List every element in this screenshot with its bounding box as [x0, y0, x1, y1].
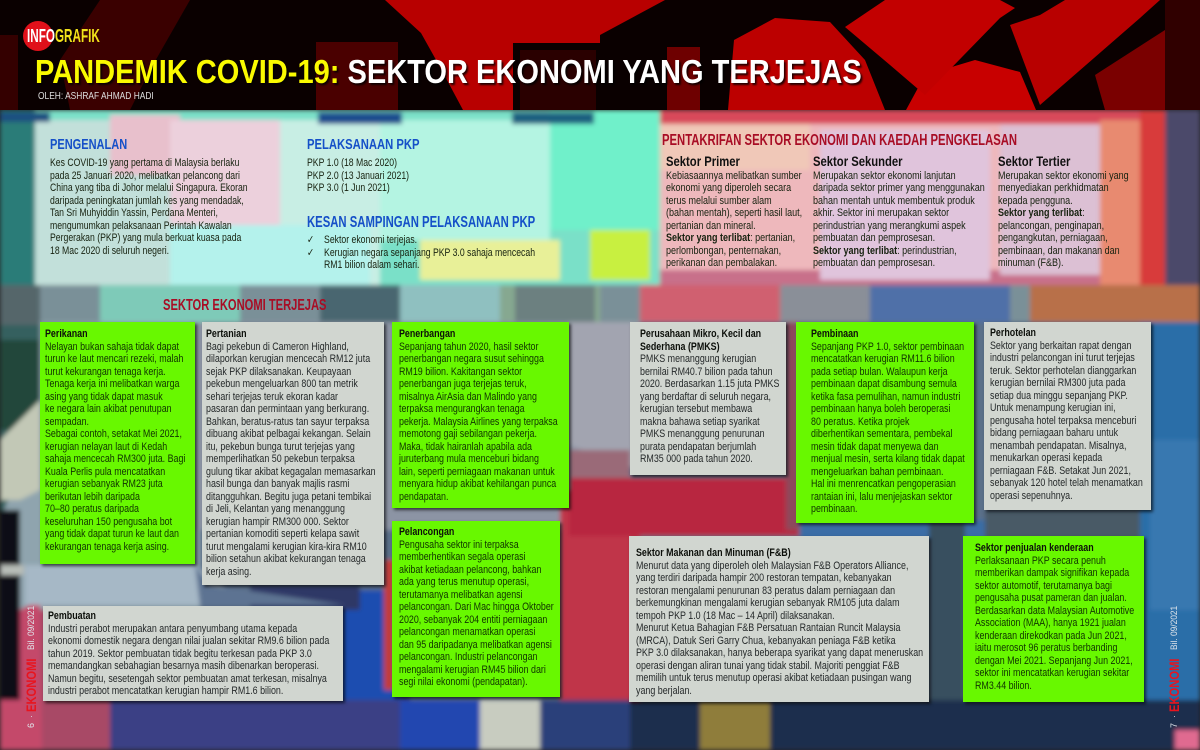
card: penerbangan: misalnya AirAsia dan Malindo yang: [399, 390, 537, 402]
column: sektor primer: Sektor yang terlibat: pertanian,: [666, 232, 795, 244]
card: makanan dan minuman: (MRCA), Datuk Seri Garry Chua, kebanyakan peniaga F&B ketika: [636, 634, 896, 646]
card: pelancongan: pelancongan. Industri pelancongan: [399, 651, 537, 663]
card: pelancongan: mengalami kerugian RM45 bilion dari: [399, 664, 546, 676]
checklist: kesan: ✓: [307, 246, 314, 258]
checklist: kesan: [307, 234, 535, 271]
text: pengenalan: Pergerakan (PKP) yang mula berkuat kuasa pada: [50, 232, 241, 244]
card: perikanan: keseluruhan 150 pengusaha bot: [45, 516, 172, 528]
panel: pengenalan: [50, 136, 248, 256]
card: perikanan: Nelayan bukan sahaja tidak dapat: [45, 340, 179, 352]
column: sektor tertier: pengangkutan, perniagaan,: [998, 232, 1108, 244]
folio: right page: Bil. 09/2021: [1169, 606, 1179, 650]
column: sektor sekunder: bahan mentah untuk membentuk produk: [813, 194, 975, 206]
card: penerbangan: Penerbangan: [399, 328, 455, 340]
main title: PANDEMIK COVID-19: SEKTOR EKONOMI YANG TERJEJAS: [35, 53, 862, 90]
column: sektor tertier: pelancongan, penginapan,: [998, 220, 1104, 232]
card: pembinaan: pada setiap bulan. Walaupun kerja: [811, 366, 948, 378]
card: pembinaan: [796, 322, 974, 523]
card: pertanian: memperlihatkan 50 pekebun terpaksa: [206, 453, 355, 465]
card: perhotelan: Perhotelan: [990, 327, 1036, 339]
text: pengenalan: [50, 157, 248, 256]
card: pembinaan: pembinaan hanya boleh beroperasi: [811, 403, 950, 415]
heading: sektor ekonomi terjejas: SEKTOR EKONOMI TERJEJAS: [163, 297, 327, 314]
heading: pentakrifan: PENTAKRIFAN SEKTOR EKONOMI DAN KAEDAH PENGKELASAN: [662, 132, 1017, 149]
card: pembinaan: mesin tidak dapat menyewa dan: [811, 440, 939, 452]
card: penjualan kenderaan: RM3.44 bilion.: [975, 680, 1032, 692]
column: sektor primer: Sektor Primer: [666, 153, 740, 169]
card: penerbangan: [392, 322, 569, 508]
byline: OLEH: ASHRAF AHMAD HADI: [38, 90, 154, 102]
column: sektor tertier: menyediakan perkhidmatan: [998, 182, 1109, 194]
card: makanan dan minuman: yang berjalan.: [636, 684, 692, 696]
card: makanan dan minuman: tempoh PKP 1.0 (18 Mac – 14 April) dilaksanakan.: [636, 610, 835, 622]
card: perikanan: Perikanan: [45, 328, 88, 340]
card: pelancongan: Pelancongan: [399, 526, 454, 538]
column: sektor sekunder: daripada sektor primer yang menggunakan: [813, 182, 985, 194]
card: makanan dan minuman: [629, 536, 929, 702]
card: pertanian: Bagi pekebun di Cameron Highland,: [206, 340, 349, 352]
heading: pelaksanaan PKP: PELAKSANAAN PKP: [307, 136, 420, 153]
card: pertanian: sehari terjejas teruk ekoran kadar: [206, 390, 338, 402]
card: pertanian: di Jeli, Kelantan yang menanggung: [206, 503, 345, 515]
card: PMKS: Sederhana (PMKS): [640, 340, 720, 352]
card: pertanian: gulung tikar akibat kegagalan memasarkan: [206, 466, 376, 478]
card: makanan dan minuman: operasi dengan aliran tunai yang tidak stabil. Majoriti penggiat F&B: [636, 660, 900, 672]
text: PKP dates: PKP 2.0 (13 Januari 2021): [307, 170, 409, 182]
card: pertanian: pekebun mengeluarkan 800 tan metrik: [206, 378, 358, 390]
column: sektor primer: (bahan mentah), seperti hasil laut,: [666, 207, 802, 219]
card: perikanan: kekurangan tenaga kerja asing.: [45, 540, 169, 552]
card: pembinaan: Hal ini menrencatkan pengoperasian: [811, 478, 956, 490]
column: sektor primer: perlombongan, penternakan,: [666, 244, 781, 256]
card: makanan dan minuman: yang terdiri daripada hampir 200 restoran tempatan, kebanyakan: [636, 572, 892, 584]
card: perikanan: asing yang tidak dapat masuk: [45, 390, 163, 402]
card: pembinaan: ketika fasa pemulihan, namun industri: [811, 390, 960, 402]
card: PMKS: PMKS menanggung kerugian: [640, 353, 756, 365]
text: pengenalan: 18 Mac 2020 di seluruh negeri.: [50, 244, 169, 256]
card: makanan dan minuman: Menurut data yang diperoleh oleh Malaysian F&B Operators Alliance,: [636, 560, 908, 572]
card: perikanan: kerugian sebanyak RM23 juta: [45, 478, 163, 490]
card: perikanan: turut kekurangan tenaga kerja.: [45, 366, 166, 378]
card: penerbangan: pendapatan.: [399, 490, 448, 502]
card: pembinaan: rantaian ini, lalu menjejaskan sektor: [811, 490, 952, 502]
folio: left page: Bil. 09/2021: [26, 606, 36, 650]
card: pertanian: kerja asing.: [206, 566, 251, 578]
card: pelancongan: pelancongan menamatkan operasi: [399, 626, 535, 638]
card: perikanan: Kuala Perlis pula mencatatkan: [45, 466, 165, 478]
text: pengenalan: pada 25 Januari 2020, melibatkan pelancong dari: [50, 170, 240, 182]
card: penjualan kenderaan: iaitu merosot 96 peratus berbanding: [975, 642, 1117, 654]
text: PKP dates: PKP 3.0 (1 Jun 2021): [307, 182, 390, 194]
card: pembuatan: tahun 2019. Sektor pembuatan tidak begitu terkesan pada PKP 3.0: [48, 648, 312, 660]
panel: pentakrifan sektor: [662, 132, 1129, 269]
card: pembuatan: Industri perabot merupakan antara penyumbang utama kepada: [48, 622, 297, 634]
card: perhotelan: teruk. Sektor perhotelan dianggarkan: [990, 364, 1136, 376]
card: pelancongan: pelancongan. Dari Mac hingga Oktober: [399, 601, 554, 613]
card: perikanan: berikutan lebih daripada: [45, 490, 140, 502]
badge: infografik: [23, 21, 100, 51]
card: pertanian: sejak PKP dilaksanakan. Keupayaan: [206, 366, 351, 378]
card: pembuatan: memandangkan sebahagian besarnya masih dibenarkan beroperasi.: [48, 660, 319, 672]
card: PMKS: kerugian tersebut membawa: [640, 403, 752, 415]
card: pertanian: bilion setahun akibat kekurangan tenaga: [206, 553, 366, 565]
card: penerbangan: pekerja. Malaysia Airlines yang terpaksa: [399, 416, 558, 428]
card: pertanian: Pertanian: [206, 328, 247, 340]
card: PMKS: [630, 322, 786, 475]
column: sektor tertier: [998, 153, 1129, 269]
checklist: kesan: Sektor ekonomi terjejas.: [324, 234, 417, 246]
card: penerbangan: Sepanjang tahun 2020, hasil sektor: [399, 340, 538, 352]
card: pelancongan: dan 95 daripadanya melibatkan agensi: [399, 638, 552, 650]
text: pengenalan: mengumumkan pelaksanaan Perintah Kawalan: [50, 220, 232, 232]
card: PMKS: purata pendapatan berjumlah: [640, 440, 756, 452]
card: perhotelan: Untuk menampung kerugian ini,: [990, 402, 1116, 414]
card: PMKS: Perusahaan Mikro, Kecil dan: [640, 328, 761, 340]
column: sektor primer: ekonomi yang diperoleh secara: [666, 182, 791, 194]
card: pelancongan: ada yang terus menutup operasi,: [399, 576, 529, 588]
card: perikanan: Sebagai contoh, setakat Mei 2021,: [45, 428, 182, 440]
card: pembuatan: Pembuatan: [48, 610, 96, 622]
windows: [0, 112, 50, 122]
card: penjualan kenderaan: sektor ini mencatatkan kerugian sekitar: [975, 667, 1129, 679]
card: pelancongan: 2020, sebanyak 204 entiti perniagaan: [399, 614, 547, 626]
card: makanan dan minuman: Sektor Makanan dan Minuman (F&B): [636, 547, 791, 559]
card: perikanan: [40, 322, 195, 564]
card: PMKS: PMKS menanggung penurunan: [640, 428, 765, 440]
top band: [0, 0, 1200, 110]
card: PMKS: yang berdaftar di seluruh negara,: [640, 390, 771, 402]
card: perikanan: yang tidak dapat turun ke laut dan: [45, 528, 179, 540]
card: perhotelan: operasi sepenuhnya.: [990, 490, 1073, 502]
text: pengenalan: Tan Sri Muhyiddin Yassin, Perdana Menteri,: [50, 207, 218, 219]
card: pembinaan: mengeluarkan bahan pembinaan.: [811, 466, 944, 478]
card: PMKS: 2020. Berdasarkan 1.15 juta PMKS: [640, 378, 779, 390]
card: penjualan kenderaan: pengusaha pusat pameran dan jualan.: [975, 592, 1127, 604]
column: sektor sekunder: pembuatan dan pemprosesan.: [813, 232, 935, 244]
mid band: [0, 110, 1200, 285]
card: pelancongan: segi nilai ekonomi (pendapatan).: [399, 676, 528, 688]
card: perikanan: sempadan.: [45, 416, 89, 428]
text: pengenalan: Kes COVID-19 yang pertama di Malaysia berlaku: [50, 157, 239, 169]
badge: infografik: INFOGRAFIK: [27, 26, 100, 46]
card: PMKS: bernilai RM40.7 bilion pada tahun: [640, 366, 773, 378]
card: pertanian: ditangguhkan. Begitu juga petani tembikai: [206, 490, 371, 502]
card: penjualan kenderaan: sektor automotif, terutamanya bagi: [975, 580, 1112, 592]
card: pertanian: [202, 322, 384, 585]
column: sektor sekunder: Sektor yang terlibat: perindustrian,: [813, 244, 957, 256]
column: sektor sekunder: Merupakan sektor ekonomi lanjutan: [813, 170, 956, 182]
lower mural: [0, 280, 1200, 750]
text: PKP dates: PKP 1.0 (18 Mac 2020): [307, 157, 397, 169]
card: pelancongan: memberhentikan segala operasi: [399, 551, 526, 563]
card: pertanian: pasaran dan permintaan yang berkurang.: [206, 403, 369, 415]
card: penerbangan: terpaksa mengurangkan tenaga: [399, 403, 525, 415]
checklist: kesan: RM1 bilion dalam sehari.: [324, 259, 419, 271]
panel: pelaksanaan PKP: [307, 136, 535, 271]
column: sektor primer: perikanan dan pembalakan.: [666, 257, 777, 269]
card: pertanian: turut mengalami kerugian kira-kira RM10: [206, 540, 367, 552]
card: penjualan kenderaan: dengan Mei 2021. Sepanjang Jun 2021,: [975, 654, 1133, 666]
card: pembinaan: pembinaan dapat disambung semula: [811, 378, 957, 390]
card: pembinaan: menjual mesin, serta kilang tidak dapat: [811, 453, 965, 465]
card: penerbangan: lain, seperti perniagaan makanan untuk: [399, 466, 555, 478]
card: perhotelan: pengusaha hotel terpaksa menceburi: [990, 414, 1136, 426]
column: sektor tertier: Merupakan sektor ekonomi yang: [998, 170, 1129, 182]
folio: right page: EKONOMI: [1166, 658, 1182, 712]
card: penerbangan: penerbangan negara susut sehingga: [399, 353, 544, 365]
card: penjualan kenderaan: Sektor penjualan kenderaan: [975, 542, 1094, 554]
title block: [23, 21, 864, 102]
folio: right page: [1166, 606, 1182, 728]
card: pelancongan: akibat ketiadaan pelancong, bahkan: [399, 564, 541, 576]
card: penjualan kenderaan: Association (MAA), hanya 1921 jualan: [975, 617, 1126, 629]
column: sektor sekunder: perindustrian yang merangkumi aspek: [813, 220, 966, 232]
card: perikanan: turun ke laut mencari rezeki, malah: [45, 353, 183, 365]
card: pembuatan: industri perabot mencatatkan kerugian hampir RM1.6 bilion.: [48, 685, 283, 697]
card: pembinaan: diberhentikan sementara, pembekal: [811, 428, 952, 440]
card: perikanan: Tenaga kerja ini melibatkan warga: [45, 378, 179, 390]
card: pelancongan: terutamanya melibatkan agensi: [399, 588, 523, 600]
card: penerbangan: RM19 bilion. Kakitangan sektor: [399, 366, 522, 378]
card: PMKS: makna bahawa setiap syarikat: [640, 416, 760, 428]
card: perikanan: ke negara lain akibat penutupan: [45, 403, 172, 415]
card: penjualan kenderaan: Perlaksanaan PKP secara penuh: [975, 554, 1106, 566]
card: pembuatan: ekonomi domestik negara dengan nilai jualan sekitar RM9.6 bilion pada: [48, 635, 329, 647]
column: sektor primer: pertanian dan mineral.: [666, 220, 756, 232]
checklist: kesan: Kerugian negara sepanjang PKP 3.0 sahaja mencecah: [324, 246, 535, 258]
checklist: kesan: ✓: [307, 234, 314, 246]
card: perhotelan: kerugian bernilai RM300 juta pada: [990, 377, 1125, 389]
text: pengenalan: China yang tiba di Johor melalui Singapura. Ekoran: [50, 182, 248, 194]
card: pertanian: dilaporkan kerugian mencecah RM12 juta: [206, 353, 370, 365]
card: perikanan: 70–80 peratus daripada: [45, 503, 139, 515]
card: pertanian: Bahkan, beratus-ratus tan sayur terpaksa: [206, 416, 369, 428]
column: sektor primer: Kebiasaannya melibatkan sumber: [666, 170, 802, 182]
card: penjualan kenderaan: memberikan dampak signifikan kepada: [975, 567, 1129, 579]
card: perhotelan: bidang perniagaan baharu untuk: [990, 427, 1118, 439]
card: makanan dan minuman: restoran mengalami penurunan 83 peratus dalam perniagaan dan: [636, 584, 895, 596]
card: perikanan: sahaja mencecah RM300 juta. Bagi: [45, 453, 185, 465]
card: perhotelan: industri pelancongan ini turut terjejas: [990, 352, 1135, 364]
card: pembinaan: pembinaan.: [811, 503, 857, 515]
card: pembinaan: 80 peratus. Ketika projek: [811, 416, 909, 428]
folio: left page: 6 ·: [26, 715, 36, 728]
card: makanan dan minuman: memilih untuk terus menutup operasi akibat ketiadaan pusingan wang: [636, 672, 911, 684]
text: PKP dates: [307, 157, 409, 194]
card: penerbangan: memotong gaji sebilangan pekerja.: [399, 428, 537, 440]
card: pembinaan: Sepanjang PKP 1.0, sektor pembinaan: [811, 340, 964, 352]
card: makanan dan minuman: berkemungkinan mengalami kerugian sebanyak RM105 juta dalam: [636, 597, 900, 609]
card: perhotelan: sebanyak 120 hotel telah menamatkan: [990, 477, 1143, 489]
card: penerbangan: menyara hidup akibat kehilangan punca: [399, 478, 556, 490]
card: perhotelan: setiap dua minggu sepanjang PKP.: [990, 390, 1128, 402]
card: pembuatan: Namun begitu, sesetengah sektor pembuatan amat terkesan, misalnya: [48, 672, 327, 684]
card: perikanan: kerugian nelayan laut di Kedah: [45, 440, 167, 452]
card: penerbangan: penerbangan juga terjejas teruk,: [399, 378, 527, 390]
column: sektor sekunder: akhir. Sektor ini merupakan sektor: [813, 207, 949, 219]
card: penerbangan: juruterbang mula menceburi bidang: [399, 453, 539, 465]
column: sektor primer: terus melalui sumber alam: [666, 194, 772, 206]
folio: right page: 7 ·: [1169, 715, 1179, 728]
card: pelancongan: [392, 521, 560, 697]
column: sektor sekunder: Sektor Sekunder: [813, 153, 903, 169]
card: pertanian: pertanian komoditi seperti kelapa sawit: [206, 528, 359, 540]
folio: left page: [23, 606, 39, 728]
card: penjualan kenderaan: kenderaan direkodkan pada Jun 2021,: [975, 630, 1127, 642]
text: pengenalan: daripada peningkatan jumlah kes yang mendadak,: [50, 194, 244, 206]
column: sektor tertier: pembinaan, dan makanan dan: [998, 244, 1120, 256]
column: sektor tertier: kepada pengguna.: [998, 194, 1073, 206]
card: pertanian: kerugian hampir RM300 000. Sektor: [206, 516, 349, 528]
card: penjualan kenderaan: [963, 536, 1144, 702]
card: pembuatan: [43, 606, 343, 701]
card: penjualan kenderaan: Berdasarkan data Malaysian Automotive: [975, 604, 1134, 616]
column: sektor sekunder: [813, 153, 985, 269]
card: perhotelan: Sektor yang berkaitan rapat dengan: [990, 340, 1131, 352]
column: sektor sekunder: pembuatan dan pemprosesan.: [813, 257, 935, 269]
card: pertanian: hasil bunga dan banyak majlis rasmi: [206, 478, 349, 490]
card: makanan dan minuman: PKP 3.0 dilaksanakan, hanya beberapa syarikat yang dapat meneruskan: [636, 647, 923, 659]
card: perhotelan: menambah pendapatan. Misalnya,: [990, 440, 1126, 452]
card: pembinaan: mencatatkan kerugian RM11.6 bilion: [811, 353, 955, 365]
column: sektor tertier: minuman (F&B).: [998, 257, 1064, 269]
card: perhotelan: [984, 322, 1151, 510]
card: pembinaan: Pembinaan: [811, 328, 858, 340]
card: perhotelan: perniagaan F&B. Setakat Jun 2021,: [990, 464, 1131, 476]
card: pelancongan: Pengusaha sektor ini terpaksa: [399, 538, 519, 550]
column: sektor tertier: Sektor Tertier: [998, 153, 1070, 169]
card: penerbangan: Maka, tidak hairanlah apabila ada: [399, 440, 532, 452]
card: pertanian: dibuang akibat pelbagai kekangan. Selain: [206, 428, 371, 440]
card: PMKS: RM35 000 pada tahun 2020.: [640, 453, 753, 465]
column: sektor tertier: Sektor yang terlibat:: [998, 207, 1085, 219]
heading: pengenalan: PENGENALAN: [50, 136, 127, 153]
folio: left page: EKONOMI: [23, 658, 39, 712]
card: pertanian: itu, pekebun bunga turut terjejas yang: [206, 440, 355, 452]
card: perhotelan: menukarkan operasi kepada: [990, 452, 1102, 464]
column: sektor primer: [666, 153, 802, 269]
heading: kesan sampingan: KESAN SAMPINGAN PELAKSANAAN PKP: [307, 214, 535, 231]
card: makanan dan minuman: Menurut Ketua Bahagian F&B Persatuan Rantaian Runcit Malaysia: [636, 622, 901, 634]
